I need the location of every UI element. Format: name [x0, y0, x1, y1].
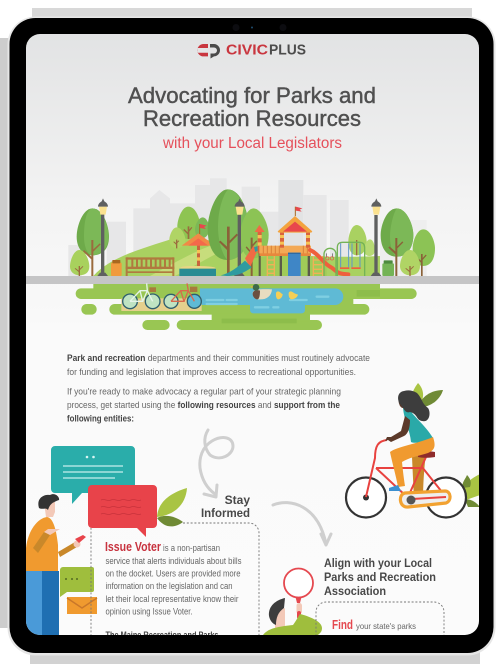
heading: align with association: Parks and Recreation	[324, 572, 436, 584]
heading: stay informed: Stay	[225, 493, 250, 507]
seat	[418, 451, 435, 458]
sand bank	[121, 298, 202, 311]
pants	[26, 571, 45, 635]
logo: CIVIC	[226, 42, 269, 58]
subtitle: with your Local Legislators	[162, 135, 342, 152]
logo	[197, 42, 306, 58]
lamp right	[371, 198, 381, 276]
intro paragraph 1: for funding and legislation that improves access to recreational opportunities.	[67, 367, 356, 378]
green chat bubble	[60, 567, 94, 597]
red chat bubble	[88, 485, 157, 537]
issue voter text: Issue Voter	[105, 540, 161, 554]
issue voter text: service that alerts individuals about bills	[106, 556, 242, 566]
lamp left	[97, 198, 108, 276]
intro paragraph 1: Park and recreation departments and their communities must routinely advocate	[67, 353, 370, 364]
heading: stay informed	[201, 493, 250, 520]
bike frame	[366, 440, 446, 497]
issue voter text: is a non-partisan	[163, 543, 220, 553]
heading: align with association: Association	[324, 586, 386, 598]
issue voter text: opinion using Issue Voter.	[106, 606, 192, 616]
panel: find association: Find	[332, 618, 353, 632]
hair	[38, 494, 59, 510]
intro paragraph 2	[67, 386, 341, 424]
squiggle arrow	[200, 430, 233, 497]
phone	[75, 535, 86, 543]
face	[398, 392, 408, 408]
heading: stay informed: Informed	[201, 506, 250, 520]
skyline	[68, 178, 427, 277]
leaves	[157, 488, 187, 526]
sand umbrella	[179, 224, 216, 276]
panel: find association: your state's parks	[356, 621, 416, 631]
bin green	[382, 260, 394, 276]
teal chat bubble	[51, 446, 135, 504]
bicycles	[123, 283, 201, 309]
park illustration	[23, 178, 490, 330]
rider body	[385, 390, 435, 491]
pond	[200, 288, 343, 313]
tree left	[70, 208, 109, 276]
shoe	[389, 485, 401, 491]
trees right	[381, 208, 435, 276]
heading: align with association	[324, 558, 436, 598]
pointing arm	[33, 532, 50, 553]
heading: align with association: Align with your Local	[324, 558, 432, 570]
teal top	[403, 408, 433, 443]
playground structure	[255, 207, 348, 276]
title: Advocating for Parks and	[128, 83, 376, 108]
torso	[26, 517, 58, 571]
small trees	[169, 207, 209, 248]
cyclist	[346, 383, 480, 518]
front leg and pants	[390, 437, 435, 487]
phone hand	[74, 540, 80, 548]
issue voter text: The Maine Recreation and Parks	[106, 630, 218, 640]
big tree	[208, 189, 269, 276]
intro paragraph 2: If you're ready to make advocacy a regular part of your strategic planning	[67, 386, 341, 398]
logo: PLUS	[269, 42, 306, 58]
issue voter text: on the docket. Users are provided more	[106, 568, 240, 578]
road	[23, 276, 490, 284]
neck and face	[44, 502, 55, 517]
swings and back trees	[324, 225, 375, 276]
issue voter text	[105, 540, 242, 640]
leaves behind rider	[412, 383, 480, 507]
back leg	[412, 456, 426, 491]
wheels	[346, 478, 466, 518]
forearm	[58, 542, 77, 557]
issue voter text: let their local representative know their	[106, 594, 239, 604]
left slide	[221, 246, 258, 276]
ducks	[250, 284, 298, 299]
title: Recreation Resources	[143, 106, 361, 131]
chain guard	[400, 491, 450, 507]
curved arrow	[273, 503, 331, 545]
hill	[93, 238, 380, 276]
bench	[126, 257, 174, 276]
intro paragraph 1	[67, 354, 370, 377]
pointing hand	[44, 529, 60, 535]
lamp middle	[234, 198, 245, 276]
magnifying glass person	[263, 568, 322, 635]
arm	[385, 416, 410, 442]
green ground	[76, 284, 417, 330]
intro paragraph 2: process, get started using the following resources and support from the	[67, 400, 340, 411]
envelope icon	[67, 597, 97, 614]
bin orange	[111, 260, 122, 276]
panel: stay informed	[91, 523, 259, 640]
title	[128, 86, 375, 126]
panel: find association	[316, 602, 444, 640]
issue voter text: information on the legislation and can	[106, 581, 232, 591]
man with phone	[26, 494, 86, 635]
hair	[398, 390, 430, 421]
intro paragraph 2: following entities:	[67, 414, 134, 424]
